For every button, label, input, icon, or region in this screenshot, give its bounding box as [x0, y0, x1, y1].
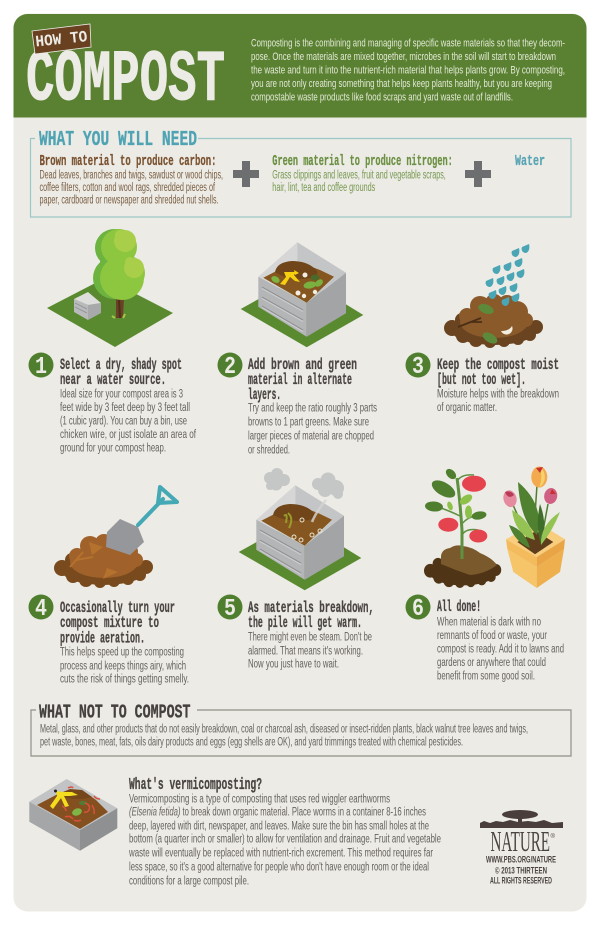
step 3 body: of organic matter. [437, 402, 497, 414]
header band [14, 14, 586, 122]
vermicomposting body: bottom (a quarter inch or smaller) to allow for ventilation and drainage. Fruit and vegetable [129, 834, 441, 846]
step 2 body: or shredded. [248, 444, 290, 456]
brown material: Dead leaves, branches and twigs, sawdust or wood chips, [40, 170, 223, 182]
step 2 body [248, 402, 377, 456]
step 1 heading: Select a dry, shady spot [60, 356, 182, 374]
number badge 5 [218, 594, 242, 623]
number badge 2: 2 [224, 354, 236, 381]
how to label: HOW TO [35, 28, 89, 51]
step 6 body: When material is dark with no [437, 616, 541, 628]
vermicomposting text [128, 775, 441, 888]
step 5 body: There might even be steam. Don't be [248, 632, 372, 644]
step 4 body: This helps speed up the composting [60, 646, 184, 658]
step 6 heading: All done! [437, 598, 481, 616]
icon: steam clouds [264, 468, 344, 499]
vermicomposting body: (Elsenia fetida) [129, 806, 181, 818]
green material [272, 153, 453, 194]
step 1 body: feet wide by 3 feet deep by 3 feet tall [60, 402, 190, 414]
step 5 [218, 594, 374, 670]
step 1 [28, 352, 197, 454]
logo: nature: WWW.PBS.ORG/NATURE [486, 854, 556, 864]
brown material [40, 153, 223, 206]
step 2 [218, 352, 377, 456]
vermicomposting body: to break down organic material. Place worms in a container 8-16 inches [182, 806, 426, 818]
green material: hair, lint, tea and coffee grounds [272, 182, 375, 194]
vermicomposting body: Vermicomposting is a type of composting that uses red wiggler earthworms [129, 794, 390, 806]
illustration: moist compost pile with water drops [444, 244, 543, 348]
step 2 body: browns to 1 part greens. Make sure [248, 416, 369, 428]
vermicomposting body [128, 794, 441, 888]
step 5 body: alarmed. That means it's working. [248, 646, 363, 658]
flower pot with tulips [502, 466, 565, 588]
vermicomposting body: deep, layered with dirt, newspaper, and leaves. Make sure the bin has small holes at the [129, 820, 429, 832]
step 6 body [437, 616, 564, 682]
illustration: shovel turning compost [54, 487, 177, 588]
panel: what not to compost [31, 702, 571, 756]
step 1 heading: near a water source. [60, 371, 166, 389]
number badge 1: 1 [35, 354, 47, 381]
vermicomposting body: waste will eventually be replaced with nutrient-rich excrement. This method requires far [128, 848, 433, 860]
step 2 body: larger pieces of material are chopped [248, 430, 374, 442]
number badge 2 [218, 352, 242, 381]
step 1 body: chicken wire, or just isolate an area of [60, 429, 197, 441]
number badge 3: 3 [412, 354, 424, 381]
intro text [251, 38, 565, 104]
water: Water [515, 153, 545, 170]
step 4 heading [60, 599, 175, 648]
step 6 [406, 594, 564, 682]
step 6 body: remnants of food or waste, your [437, 630, 547, 642]
step 2 heading: material in alternate [248, 371, 352, 389]
icon: plus [465, 161, 491, 187]
step 6 body: benefit from some good soil. [437, 670, 535, 682]
step 3 heading [437, 356, 559, 389]
step 3 [406, 352, 559, 414]
tomato plant [424, 467, 501, 588]
step 1 body: Ideal size for your compost area is 3 [60, 388, 183, 400]
step 1 body [60, 388, 197, 454]
icon: water drops [486, 244, 529, 306]
step 2 heading [248, 356, 357, 404]
green material: Grass clippings and leaves, fruit and vegetable scraps, [272, 170, 446, 182]
title: COMPOST [26, 40, 225, 122]
step 5 heading: As materials breakdown, [248, 599, 374, 617]
illustration: tomato plant and tulips [424, 466, 565, 588]
heading: what you will need: WHAT YOU WILL NEED [39, 129, 197, 152]
number badge 4 [28, 594, 54, 623]
number badge 4: 4 [35, 596, 47, 623]
step 5 heading: the pile will get warm. [248, 614, 362, 632]
green material: Green material to produce nitrogen: [272, 153, 453, 170]
number badge 6 [406, 594, 430, 623]
what not to compost body [40, 724, 528, 748]
vermicomposting body: less space, so it's a good alternative for people who don't have enough room or the ideal [129, 862, 429, 874]
step 1 body: (1 cubic yard). You can buy a bin, use [60, 416, 187, 428]
step 5 body: Now you just have to wait. [248, 658, 339, 670]
step 1 body: ground for your compost heap. [60, 442, 166, 454]
logo: nature: © 2013 THIRTEEN [495, 866, 547, 876]
step 4 heading: compost mixture to [60, 614, 159, 632]
step 4 heading: Occasionally turn your [60, 599, 175, 617]
step 4 [28, 594, 189, 686]
illustration: worm bin [29, 779, 117, 851]
step 2 heading: Add brown and green [248, 356, 357, 374]
step 3 body [437, 388, 559, 414]
panel: what you will need [30, 129, 571, 217]
logo: nature [480, 810, 563, 886]
number badge 6: 6 [412, 596, 424, 623]
logo: nature: ® [550, 833, 556, 840]
step 5 body [248, 632, 372, 670]
brown material: paper, cardboard or newspaper and shredded nut shells. [40, 194, 218, 206]
illustration: warm steaming bin [239, 468, 361, 590]
number badge 1 [28, 352, 54, 381]
step 1 heading [60, 356, 182, 389]
icon: plus [233, 161, 259, 187]
step 4 body: process and keeps things airy, which [60, 660, 186, 672]
icon: shovel [106, 487, 177, 555]
step 5 heading [248, 599, 374, 632]
brown material: coffee filters, cotton and wool rags, shredded pieces of [40, 182, 216, 194]
brown material: Brown material to produce carbon: [40, 153, 216, 170]
number badge 3 [406, 352, 430, 381]
vermicomposting body: conditions for a large compost pile. [129, 876, 249, 888]
vermicomposting heading: What's vermicomposting? [129, 775, 262, 794]
step 2 body: Try and keep the ratio roughly 3 parts [248, 402, 377, 414]
step 6 body: gardens or anywhere that could [437, 657, 546, 669]
heading: what not to compost: WHAT NOT TO COMPOST [39, 702, 190, 724]
illustration: bin with brown and green material [241, 242, 363, 347]
step 4 body: cuts the risk of things getting smelly. [60, 674, 189, 686]
illustration: tree and lawn [47, 229, 173, 347]
logo: nature: ALL RIGHTS RESERVED [490, 876, 552, 886]
step 2 heading: layers. [248, 386, 281, 404]
number badge 5: 5 [224, 596, 236, 623]
step 4 heading: provide aeration. [60, 630, 145, 648]
step 4 body [60, 646, 189, 686]
